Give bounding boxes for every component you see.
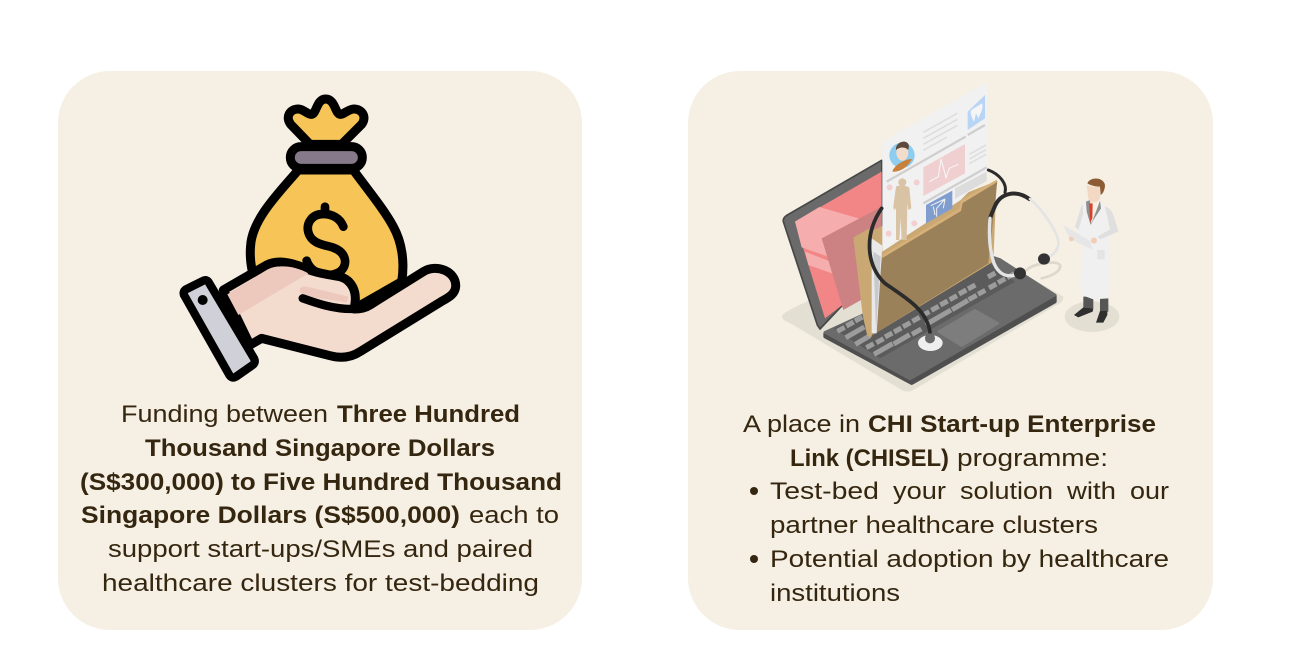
list item: test-bed xyxy=(750,478,1169,539)
list item: test-bed: with xyxy=(1066,478,1116,505)
text: funding description: Singapore Dollars (S$500,000) xyxy=(81,502,460,529)
keyboard xyxy=(837,273,1014,354)
text: funding description: (S$300,000) to Five Hundred Thousand xyxy=(80,469,562,496)
list item: test-bed: your xyxy=(893,478,946,505)
bag top xyxy=(288,99,364,144)
stethoscope xyxy=(869,170,1060,351)
illustration: laptop with medical file and doctor xyxy=(782,82,1119,392)
list item: test-bed: our xyxy=(1130,478,1169,505)
body markers xyxy=(886,179,920,237)
shirt cuff xyxy=(184,280,255,378)
list item: adoption: institutions xyxy=(770,580,900,607)
icon: hand holding money bag xyxy=(184,99,456,378)
text: CHISEL description xyxy=(743,411,1156,472)
ground shadow xyxy=(782,262,1063,392)
panel background: CHISEL xyxy=(688,71,1213,630)
grey text block xyxy=(955,172,987,199)
text: funding description: Thousand Singapore Dollars xyxy=(145,435,495,462)
list item: test-bed: Test-bed xyxy=(770,478,879,505)
folder front xyxy=(853,180,997,337)
panel: funding xyxy=(58,71,582,630)
thumb shading xyxy=(299,286,348,302)
thumb line xyxy=(303,298,352,309)
laptop base xyxy=(825,257,1055,383)
text: CHISEL description: CHI Start-up Enterprise xyxy=(868,411,1156,438)
tooth card xyxy=(968,95,985,130)
heart rate chart xyxy=(923,144,965,196)
text: CHISEL description: programme: xyxy=(957,445,1108,472)
text: CHISEL description: Link (CHISEL) xyxy=(790,445,949,472)
doctor xyxy=(1063,179,1119,332)
patient avatar xyxy=(889,143,915,168)
medical document xyxy=(882,82,988,252)
bag tie band xyxy=(290,147,362,168)
text: funding description: healthcare clusters for test-bedding xyxy=(102,570,539,597)
cuff button xyxy=(198,295,208,305)
text: CHISEL description: A place in xyxy=(743,411,860,438)
hand xyxy=(223,262,456,357)
list item: adoption xyxy=(750,546,1169,607)
panel background: funding xyxy=(58,71,582,630)
folder back xyxy=(853,181,997,337)
bag body xyxy=(250,170,403,308)
text: funding description: each to xyxy=(469,502,559,529)
x-ray card xyxy=(926,191,952,223)
list item: test-bed: solution xyxy=(960,478,1053,505)
text: funding description: support start-ups/SMEs and paired xyxy=(108,536,533,563)
list item: adoption: Potential adoption by healthcare xyxy=(770,546,1169,573)
body figure xyxy=(893,178,911,240)
list item: test-bed: partner healthcare clusters xyxy=(770,512,1098,539)
text: funding description: Three Hundred xyxy=(337,401,520,428)
text: funding description: Funding between xyxy=(121,401,328,428)
laptop screen xyxy=(783,160,883,329)
touchpad xyxy=(938,310,998,346)
panel: CHISEL programme xyxy=(688,71,1213,630)
document text lines xyxy=(923,113,986,164)
text: funding description xyxy=(80,401,562,597)
dollar sign xyxy=(307,207,345,275)
hand shading xyxy=(227,266,308,315)
